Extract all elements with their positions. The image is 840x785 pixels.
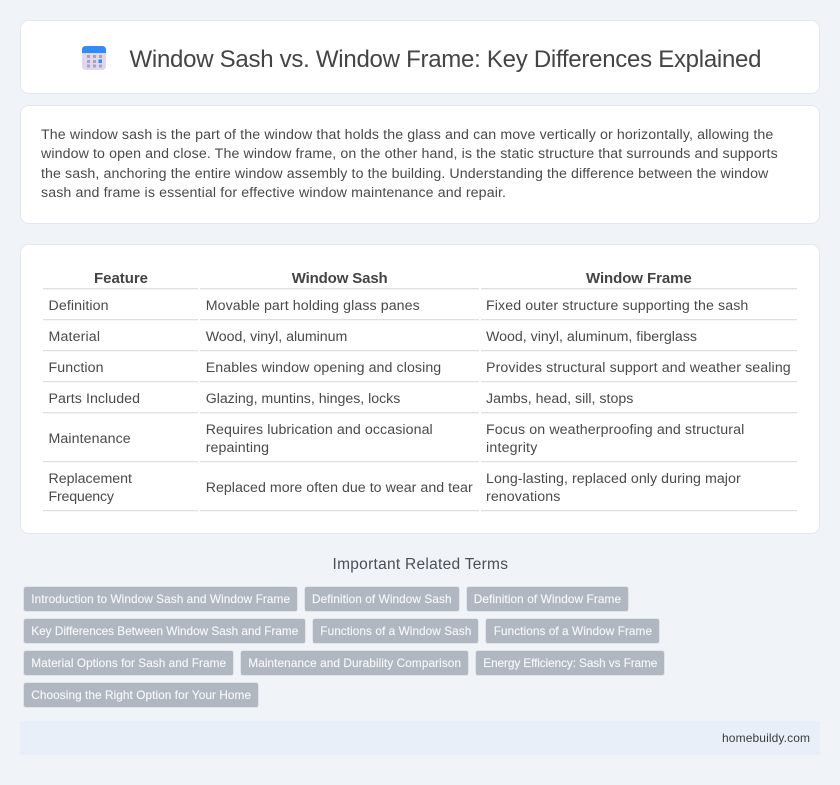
table header row: Feature: [94, 270, 148, 287]
row: definition: Fixed outer structure supporting the sash: [486, 298, 748, 314]
row: definition: [43, 298, 797, 320]
row: replacement frequency: Frequency: [48, 489, 115, 505]
row: parts included: [43, 391, 797, 413]
row: replacement frequency: [43, 471, 797, 511]
tag: [466, 586, 628, 612]
row: parts included: Glazing, muntins, hinges, locks: [206, 391, 400, 407]
row: maintenance: Focus on weatherproofing and structural: [486, 422, 744, 438]
tag: [24, 682, 258, 708]
tag: [24, 618, 306, 644]
tag: [24, 650, 234, 676]
tag: [24, 586, 298, 612]
intro paragraph: The window sash is the part of the window that holds the glass and can move vertically or horizontally, allowing the: [41, 127, 773, 143]
tag: Introduction to Window Sash and Window Frame: [31, 592, 290, 606]
intro panel: [20, 106, 820, 224]
tag: Maintenance and Durability Comparison: [248, 656, 461, 670]
row: maintenance: [43, 422, 797, 462]
row: material: Wood, vinyl, aluminum, fiberglass: [486, 329, 697, 345]
tag: [312, 618, 478, 644]
table header row: [43, 270, 797, 289]
row: parts included: Jambs, head, sill, stops: [486, 391, 633, 407]
tag: Definition of Window Frame: [474, 592, 621, 606]
row: definition: Definition: [48, 298, 108, 314]
intro paragraph: sash and frame is essential for effective window maintenance and repair.: [41, 185, 506, 201]
row: function: Enables window opening and closing: [206, 360, 441, 376]
row: replacement frequency: Replacement: [48, 471, 132, 487]
tag: Material Options for Sash and Frame: [31, 656, 226, 670]
table header row: Window Sash: [292, 270, 388, 287]
tag: Energy Efficiency: Sash vs Frame: [483, 656, 658, 670]
related terms tags: [24, 586, 664, 708]
row: function: Function: [48, 360, 104, 376]
row: material: [43, 329, 797, 351]
row: replacement frequency: Replaced more often due to wear and tear: [206, 480, 473, 496]
footer bar: [20, 721, 820, 755]
comparison table panel: [20, 244, 820, 534]
intro paragraph: window to open and close. The window frame, on the other hand, is the static structure that surrounds and supports: [40, 146, 778, 162]
table header row: Window Frame: [586, 270, 692, 287]
tag: Functions of a Window Sash: [320, 624, 471, 638]
row: function: [43, 360, 797, 382]
related terms heading: Important Related Terms: [332, 556, 508, 573]
row: material: Wood, vinyl, aluminum: [206, 329, 347, 345]
tag: [486, 618, 660, 644]
row: definition: Movable part holding glass panes: [206, 298, 420, 314]
row: maintenance: Maintenance: [48, 431, 131, 447]
header panel: [20, 20, 820, 94]
tag: [240, 650, 468, 676]
row: maintenance: repainting: [206, 440, 269, 456]
row: replacement frequency: renovations: [486, 489, 560, 505]
tag: Key Differences Between Window Sash and Frame: [31, 624, 299, 638]
tag: [304, 586, 460, 612]
tag: Functions of a Window Frame: [494, 624, 652, 638]
tag: Definition of Window Sash: [312, 592, 452, 606]
intro paragraph: [40, 127, 778, 201]
row: material: Material: [48, 329, 100, 345]
title: Window Sash vs. Window Frame: Key Differences Explained: [130, 46, 762, 73]
tag: [476, 650, 664, 676]
footer source text: homebuildy.com: [722, 731, 810, 745]
row: parts included: Parts Included: [48, 391, 140, 407]
row: replacement frequency: Long-lasting, replaced only during major: [486, 471, 741, 487]
tag: Choosing the Right Option for Your Home: [31, 688, 251, 702]
row: maintenance: integrity: [486, 440, 538, 456]
icon: calendar window: [82, 46, 106, 70]
row: function: Provides structural support and weather sealing: [486, 360, 791, 376]
row: maintenance: Requires lubrication and occasional: [206, 422, 433, 438]
intro paragraph: the sash, anchoring the entire window assembly to the building. Understanding the difference between the window: [41, 166, 769, 182]
